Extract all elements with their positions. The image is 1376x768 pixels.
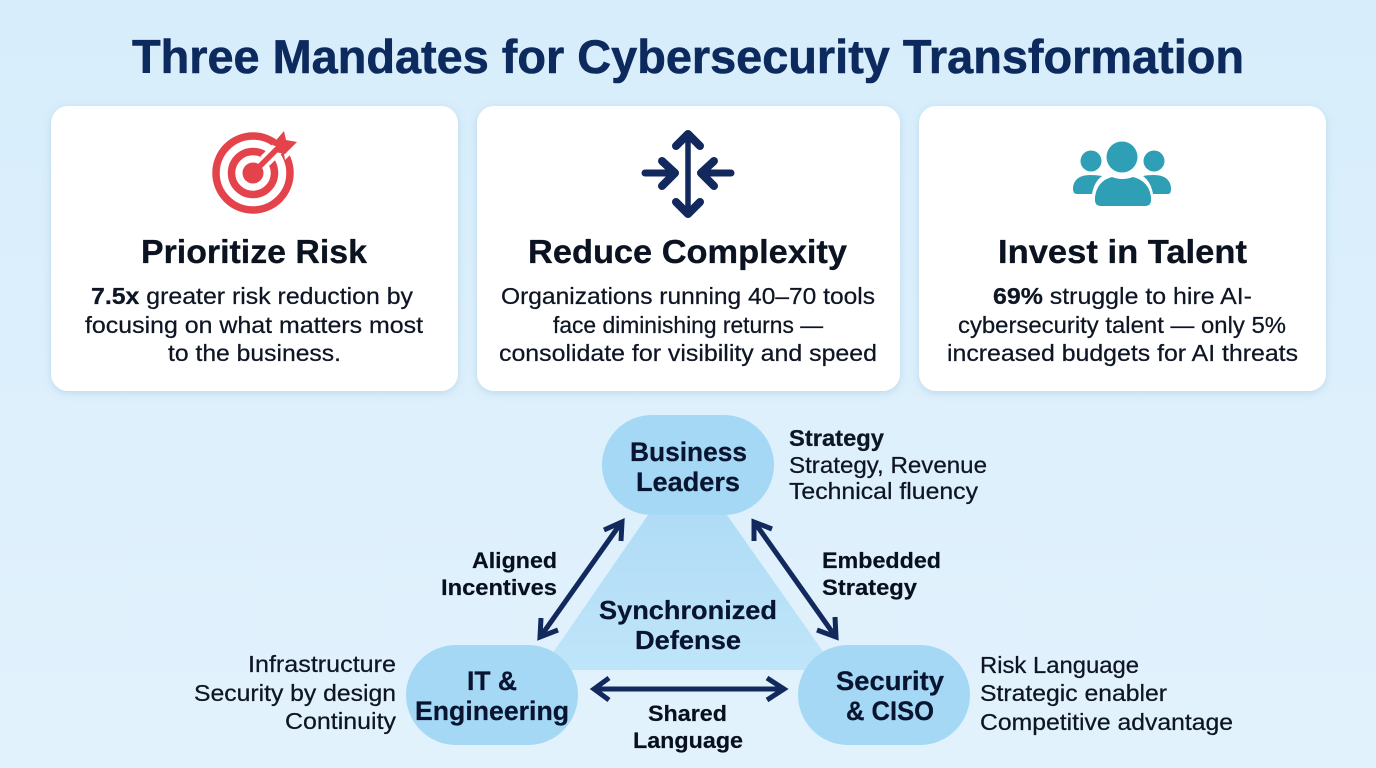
label: synchronized defense: Defense xyxy=(635,625,741,655)
icon: converging arrows xyxy=(645,134,731,214)
title: Three Mandates for Cybersecurity Transformation xyxy=(132,30,1244,83)
label: synchronized defense: Synchronized xyxy=(599,595,777,625)
arrow: it to security xyxy=(594,678,784,700)
label: aligned incentives xyxy=(441,548,557,600)
label: embedded strategy: Strategy xyxy=(822,575,917,600)
node: security and ciso: Security xyxy=(836,666,944,696)
text: reduce complexity description: face diminishing returns — xyxy=(553,312,823,338)
icon: people group xyxy=(1073,142,1171,206)
text: security and ciso details: Competitive advantage xyxy=(980,709,1233,735)
heading: prioritize risk: Prioritize Risk xyxy=(141,233,368,270)
text: prioritize risk description: focusing on what matters most xyxy=(85,312,423,338)
text: reduce complexity description: consolidate for visibility and speed xyxy=(499,340,877,366)
label: shared language xyxy=(633,701,743,753)
panel: reduce complexity xyxy=(477,106,900,391)
text: invest in talent description xyxy=(947,283,1298,366)
text: business leaders details xyxy=(789,425,987,504)
text: it and engineering details: Security by design xyxy=(194,680,396,706)
arrow: business leaders to security xyxy=(754,522,836,637)
label: shared language: Shared xyxy=(648,701,727,726)
text: reduce complexity description xyxy=(499,283,877,366)
text: business leaders details: Strategy, Revenue xyxy=(789,452,987,478)
text: prioritize risk description xyxy=(85,283,423,366)
heading: invest in talent: Invest in Talent xyxy=(998,233,1247,270)
icon: target with arrow xyxy=(216,131,300,210)
panel: prioritize risk xyxy=(51,106,458,391)
label: embedded strategy: Embedded xyxy=(822,548,941,573)
label: aligned incentives: Aligned xyxy=(472,548,557,573)
node: business leaders: Leaders xyxy=(636,467,740,497)
text: invest in talent description: 69% struggle to hire AI- xyxy=(993,283,1252,309)
node: business leaders xyxy=(602,415,774,515)
text: security and ciso details xyxy=(980,652,1233,735)
label: aligned incentives: Incentives xyxy=(441,575,557,600)
text: business leaders details: Technical fluency xyxy=(789,478,979,504)
text: invest in talent description: cybersecurity talent — only 5% xyxy=(958,312,1286,338)
text: prioritize risk description: to the business. xyxy=(168,340,341,366)
text: invest in talent description: increased budgets for AI threats xyxy=(947,340,1298,366)
label: shared language: Language xyxy=(633,728,743,753)
text: it and engineering details: Continuity xyxy=(285,708,397,734)
label: embedded strategy xyxy=(822,548,941,600)
text: it and engineering details xyxy=(194,651,397,734)
triangle: synchronized defense xyxy=(541,515,836,670)
node: it and engineering: IT & xyxy=(467,666,517,696)
arrow: business leaders to it xyxy=(540,522,622,637)
text: security and ciso details: Strategic enabler xyxy=(980,680,1167,706)
text: business leaders details: Strategy xyxy=(789,425,884,451)
text: it and engineering details: Infrastructure xyxy=(248,651,396,677)
node: it and engineering xyxy=(406,645,578,745)
text: prioritize risk description: 7.5x greater risk reduction by xyxy=(91,283,413,309)
text: reduce complexity description: Organizations running 40–70 tools xyxy=(501,283,875,309)
text: security and ciso details: Risk Language xyxy=(980,652,1139,678)
node: security and ciso xyxy=(798,645,970,745)
panel: invest in talent xyxy=(919,106,1326,391)
node: it and engineering: Engineering xyxy=(415,696,569,726)
node: business leaders: Business xyxy=(630,437,747,467)
node: security and ciso: & CISO xyxy=(846,696,934,726)
label: synchronized defense xyxy=(599,595,777,655)
heading: reduce complexity: Reduce Complexity xyxy=(528,233,848,270)
